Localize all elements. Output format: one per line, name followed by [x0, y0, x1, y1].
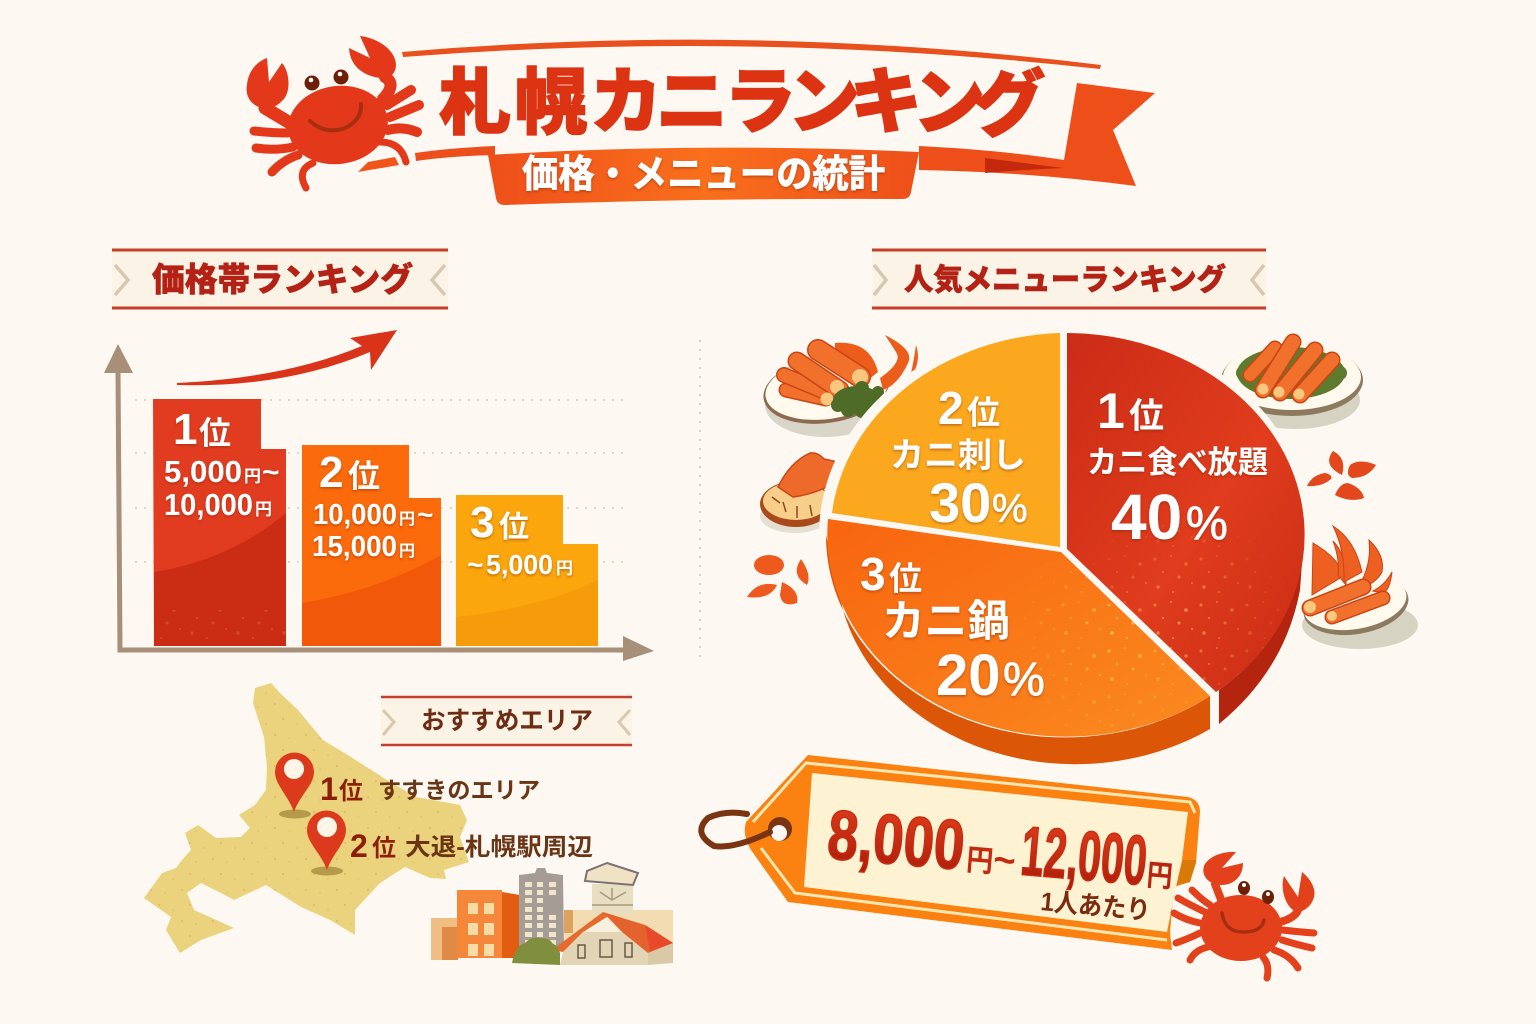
bar: rank 1: 位 — [199, 415, 231, 451]
slice: rank 1: % — [1186, 496, 1228, 549]
slice: rank 1: カニ食べ放題 — [1087, 445, 1268, 480]
bar: rank 2: 10,000 — [313, 499, 397, 531]
crab mascot top — [247, 36, 419, 188]
slice: rank 3: カニ鍋 — [882, 598, 1010, 646]
pie chart: popular menu — [819, 326, 1311, 780]
slice: rank 2: 2 — [938, 382, 964, 434]
slice: rank 3: 位 — [889, 560, 922, 597]
icon: map pin 1 — [275, 752, 314, 818]
price tag — [701, 755, 1200, 950]
icon: city buildings — [431, 863, 673, 965]
tag highlight line — [753, 763, 1195, 940]
bar: rank 1: 1 — [173, 405, 197, 454]
bar: rank 3: ~ — [467, 549, 483, 580]
tag price: 8,000 — [825, 795, 968, 884]
section heading: popular menu — [872, 250, 1266, 308]
map: Hokkaido — [144, 683, 469, 953]
subtitle band — [488, 148, 919, 205]
section heading: recommended area — [381, 697, 632, 745]
chart axes — [104, 344, 654, 661]
slice: rank 3: 20 — [936, 643, 1001, 708]
area rank 2 — [307, 811, 593, 876]
section heading: popular menu: 人気メニューランキング — [904, 263, 1226, 297]
icon: crab plate top left — [759, 335, 918, 437]
bar: rank 1: ~ — [262, 456, 280, 489]
slice: rank 3: % — [1003, 652, 1045, 705]
ribbon top arc — [402, 40, 1101, 69]
section heading: price ranking: 価格帯ランキング — [152, 261, 413, 298]
dotted divider — [699, 340, 701, 662]
icon: crab shell left — [760, 453, 838, 533]
bar: rank 2: ~ — [417, 499, 433, 530]
label: rank 1 area: すすきのエリア — [378, 777, 540, 803]
pie halo — [819, 326, 1311, 780]
slice: rank 1: 位 — [1129, 397, 1164, 436]
ribbon sliver — [358, 157, 399, 172]
bar: rank 3: 5,000 — [486, 549, 553, 580]
bar: rank 2: 2 — [319, 448, 343, 497]
trend arrow — [177, 330, 397, 385]
icon: crab chips right — [1307, 451, 1376, 500]
ribbon lower band left — [415, 146, 495, 161]
bar: rank 2: 位 — [348, 458, 380, 494]
tag price: 12,000 — [1018, 812, 1150, 900]
bar: rank 2: 15,000 — [312, 531, 397, 563]
slice: rank 2: % — [992, 487, 1028, 531]
bar: rank 1: 10,000 — [164, 487, 253, 522]
icon: crab plate top right — [1221, 342, 1363, 429]
tag price — [825, 795, 1177, 902]
bar: rank 2: 円 — [399, 511, 415, 528]
slice: rank 2: 30 — [929, 471, 991, 534]
section heading: recommended area: おすすめエリア — [421, 707, 593, 735]
bar chart: price bands — [104, 330, 654, 661]
bar: rank 2 — [302, 445, 441, 646]
bar: rank 3: 3 — [470, 498, 494, 547]
bar: rank 3: 円 — [556, 559, 573, 578]
label: rank 2 area: 2 — [350, 828, 368, 864]
slice: rank 2: カニ刺し — [890, 437, 1026, 475]
tag per person note: 1人あたり — [1039, 886, 1152, 926]
label: rank 1 area — [320, 771, 540, 807]
label: rank 2 area: 大退-札幌駅周辺 — [405, 834, 593, 861]
title text: 札幌カニランキング — [439, 63, 1045, 146]
tag inner panel — [804, 773, 1188, 932]
tag hole and string — [701, 813, 792, 846]
slice: rank 3 — [827, 519, 1210, 737]
slice: rank 1: 40 — [1111, 481, 1182, 553]
bar: rank 1: 円 — [244, 467, 261, 486]
tag price: ~ — [992, 839, 1017, 883]
subtitle text: 価格・メニューの統計 — [522, 154, 885, 196]
ribbon fold — [985, 158, 1063, 173]
tag body — [745, 755, 1200, 950]
label: rank 2 area: 位 — [372, 835, 396, 862]
slice: rank 3: 3 — [860, 548, 886, 600]
section heading: price ranking — [112, 250, 448, 308]
crab mascot bottom — [1174, 852, 1314, 978]
slice: rank 2 — [832, 333, 1060, 547]
bar: rank 2: 円 — [399, 543, 415, 560]
bar: rank 1 — [153, 399, 286, 646]
slice: rank 1 — [1067, 333, 1305, 692]
title banner — [358, 40, 1155, 205]
bar: rank 3: 位 — [499, 511, 529, 544]
tag price: 円 — [1145, 859, 1174, 894]
slice: rank 1: 1 — [1097, 383, 1125, 439]
label: rank 2 area — [350, 828, 593, 864]
bar: rank 3 — [456, 495, 598, 646]
icon: map pin 2 — [307, 811, 346, 876]
pie depth — [826, 535, 1304, 764]
slice: rank 2: 位 — [967, 394, 1000, 431]
label: rank 1 area: 1 — [320, 771, 338, 807]
label: rank 1 area: 位 — [339, 778, 363, 805]
area rank 1 — [275, 752, 540, 818]
bar: rank 1: 円 — [255, 500, 272, 519]
bar: rank 1: 5,000 — [164, 454, 242, 489]
tag corner shade — [1176, 860, 1196, 885]
icon: crab plate bottom right — [1299, 526, 1418, 649]
ribbon tail and lower band right — [919, 83, 1155, 186]
grid lines — [135, 400, 630, 562]
tag price: 円 — [965, 844, 995, 879]
icon: crab chips left — [747, 555, 809, 604]
